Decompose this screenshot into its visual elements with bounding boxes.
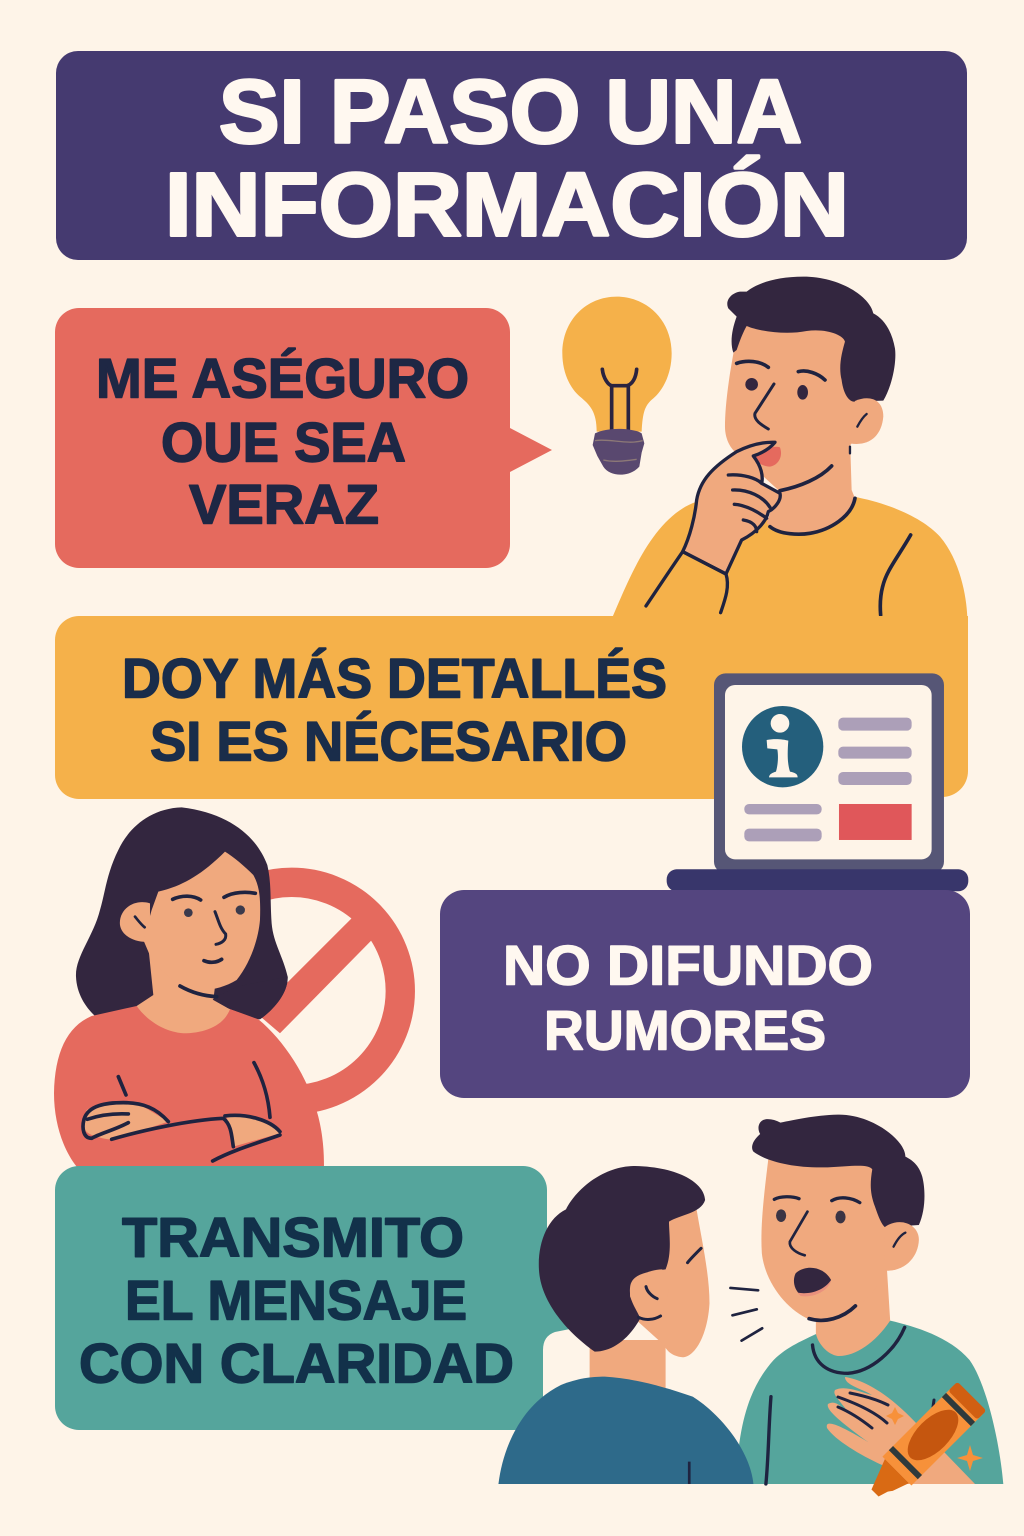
icon: crayon [861, 1382, 986, 1507]
sweater [613, 497, 967, 617]
features [118, 892, 270, 1117]
speaker neck [816, 1267, 890, 1356]
speaker hair [752, 1115, 924, 1227]
ear [120, 902, 150, 942]
panel: clarity [55, 1166, 575, 1430]
neck [137, 947, 230, 1033]
crossed arms [83, 1103, 168, 1140]
icon: sparkles [886, 1407, 983, 1471]
icon: laptop with info screen [667, 673, 968, 891]
speaker ear [884, 1222, 919, 1271]
speaker features [730, 1197, 905, 1484]
info symbol [742, 706, 823, 787]
panel: no rumours [440, 890, 970, 1098]
face [725, 307, 860, 492]
icon: light bulb [562, 297, 672, 475]
panel: verify speech bubble: OUE SEA [161, 410, 406, 474]
ear [850, 398, 883, 444]
title banner [56, 51, 967, 260]
panel: verify speech bubble: ME ASÉGURO [96, 346, 469, 410]
speaker mouth [794, 1268, 831, 1296]
panel: verify speech bubble [55, 308, 552, 568]
title banner: SI PASO UNA [219, 62, 802, 162]
listener face [625, 1203, 710, 1357]
speaker face [761, 1143, 892, 1321]
panel: clarity: EL MENSAJE [125, 1268, 467, 1332]
hair lock over shoulder [213, 977, 288, 1019]
panel: no rumours: NO DIFUNDO [503, 934, 873, 996]
listener shirt [498, 1377, 753, 1484]
speaker hand [827, 1377, 975, 1484]
panel: details: DOY MÁS DETALLÉS [122, 646, 667, 710]
speaker sweater [736, 1321, 1003, 1484]
panel: no rumours: RUMORES [544, 998, 826, 1062]
icon: prohibition sign [183, 882, 400, 1100]
panel: clarity: TRANSMITO [122, 1206, 464, 1268]
listener hair [539, 1166, 705, 1352]
sweater [54, 1006, 324, 1167]
panel: clarity: CON CLARIDAD [79, 1332, 514, 1394]
listener neck [590, 1340, 666, 1390]
hair [727, 277, 895, 402]
illustration: two people talking [498, 1115, 1003, 1484]
hair [76, 807, 288, 1019]
hand [683, 442, 780, 574]
neck [767, 437, 855, 533]
face [143, 852, 260, 990]
illustration: woman with crossed arms [54, 807, 324, 1167]
listener ear [630, 1269, 669, 1317]
illustration: thinking man [613, 277, 967, 617]
facial features [737, 361, 911, 615]
panel: verify speech bubble: VERAZ [189, 472, 379, 536]
panel: details: SI ES NÉCESARIO [150, 710, 627, 772]
panel: details [55, 616, 968, 799]
title banner: INFORMACIÓN [165, 154, 849, 256]
mouth [753, 447, 781, 467]
